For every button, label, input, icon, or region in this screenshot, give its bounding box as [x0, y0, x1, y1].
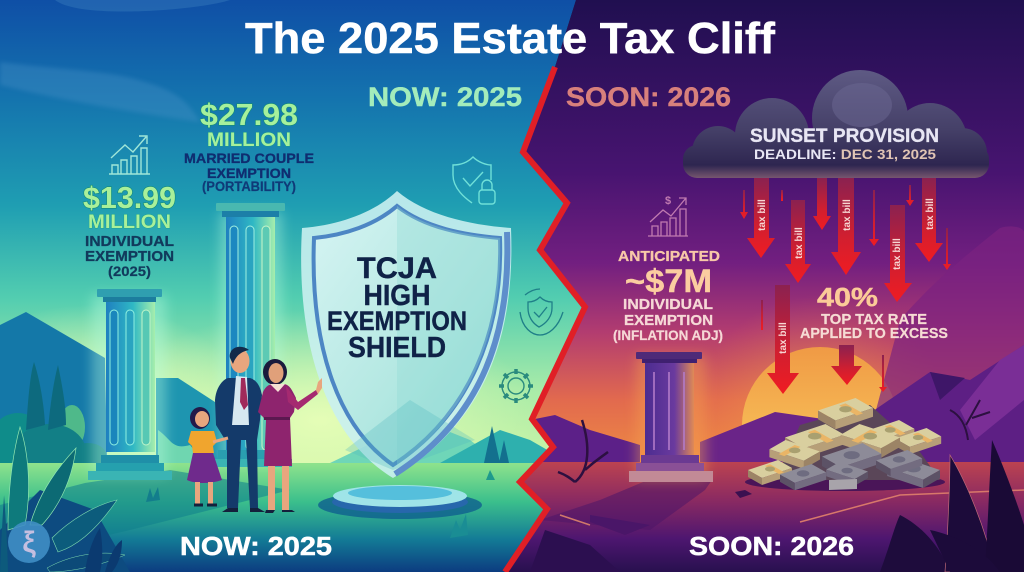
label: soon 2026: SOON: 2026 — [689, 531, 854, 561]
arrow labels: tax bill: tax bill — [757, 199, 768, 231]
text block: anticipated individual exemption — [613, 248, 723, 343]
text block: 40 percent top tax rate — [800, 282, 948, 342]
text block: shield label: EXEMPTION — [327, 306, 467, 336]
text block: 40 percent top tax rate: APPLIED TO EXCESS — [800, 325, 948, 342]
arrow labels: tax bill: tax bill — [778, 322, 789, 354]
heading: soon 2026: SOON: 2026 — [566, 82, 731, 112]
text block: individual exemption 2025: EXEMPTION — [85, 249, 174, 265]
text block: married couple exemption: MILLION — [207, 129, 291, 151]
arrow labels: tax bill: tax bill — [925, 198, 936, 230]
family group — [187, 347, 322, 513]
text block: married couple exemption — [184, 97, 314, 194]
text block: married couple exemption: (PORTABILITY) — [202, 179, 296, 194]
text block: anticipated individual exemption: ANTICIPATED — [618, 248, 720, 265]
text block: shield label: SHIELD — [348, 332, 446, 364]
woman — [258, 359, 322, 513]
pillar: married couple exemption — [210, 203, 292, 467]
pillar: individual exemption — [88, 289, 172, 480]
text block: shield label: TCJA — [357, 252, 437, 285]
title: The 2025 Estate Tax Cliff — [245, 14, 775, 63]
pedestal — [318, 485, 482, 519]
text block: married couple exemption: EXEMPTION — [207, 165, 291, 181]
text block: anticipated individual exemption: EXEMPTION — [624, 312, 713, 329]
arrow labels: tax bill — [757, 198, 936, 354]
text block: shield label: HIGH — [364, 280, 430, 312]
icon: dollar bar chart: $ — [665, 195, 671, 207]
money pile — [745, 398, 945, 491]
man — [215, 347, 265, 512]
storm cloud — [683, 70, 989, 178]
text block: individual exemption 2025: $13.99 — [83, 180, 176, 215]
heading: now 2025: NOW: 2025 — [368, 82, 522, 112]
text block: shield label — [327, 252, 467, 364]
text block: anticipated individual exemption: ~$7M — [625, 263, 712, 299]
text block: individual exemption 2025: MILLION — [88, 211, 171, 233]
icon: rising bar chart — [109, 136, 150, 174]
arrow labels: tax bill: tax bill — [794, 227, 805, 259]
text block: married couple exemption: $27.98 — [200, 97, 298, 132]
panel: now 2025 background scene — [0, 0, 600, 572]
shield: TCJA high exemption shield — [301, 191, 511, 478]
icon: shield with circular arrows — [520, 289, 563, 335]
text block: married couple exemption: MARRIED COUPLE — [184, 150, 314, 166]
pillar: anticipated exemption — [629, 352, 713, 482]
text block: sunset provision — [750, 126, 939, 162]
tax bill arrows — [740, 178, 951, 394]
text block: 40 percent top tax rate: 40% — [817, 282, 878, 312]
text block: individual exemption 2025: INDIVIDUAL — [85, 234, 174, 250]
label: now 2025: NOW: 2025 — [180, 531, 332, 561]
icon: logo badge — [8, 521, 50, 563]
text block: anticipated individual exemption: INDIVIDUAL — [623, 296, 713, 313]
icon: logo badge: ξ — [22, 526, 36, 559]
divider: red crack — [505, 67, 585, 572]
icon: shield with padlock — [453, 157, 495, 204]
text block: 40 percent top tax rate: TOP TAX RATE — [821, 311, 927, 328]
text block: individual exemption 2025: (2025) — [108, 264, 151, 279]
text block: anticipated individual exemption: (INFLATION ADJ) — [613, 328, 723, 343]
icon: dollar bar chart — [648, 195, 688, 236]
text block: sunset provision: DEADLINE: DEC 31, 2025 — [754, 146, 936, 162]
panel: soon 2026 background scene — [500, 0, 1024, 572]
text block: sunset provision: SUNSET PROVISION — [750, 126, 939, 147]
leaf cluster — [8, 427, 125, 572]
arrow labels: tax bill: tax bill — [892, 238, 903, 270]
arrow labels: tax bill: tax bill — [842, 199, 853, 231]
girl — [187, 407, 228, 505]
text block: individual exemption 2025 — [83, 180, 176, 279]
icon: gear with arrows — [499, 369, 533, 403]
